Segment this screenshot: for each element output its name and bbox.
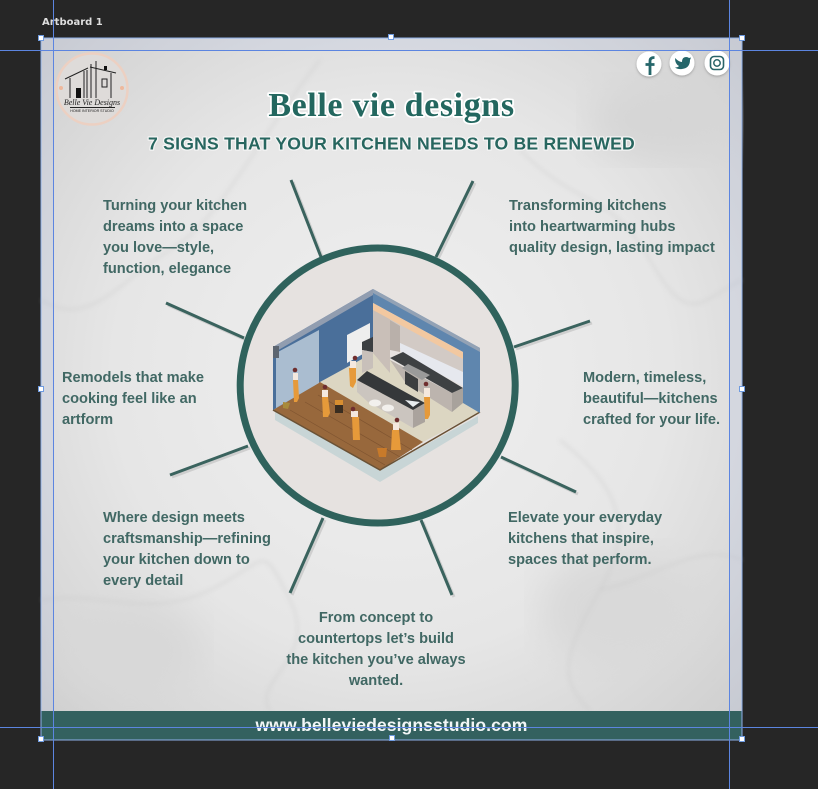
wood floor — [273, 382, 423, 470]
text: top right: into heartwarming hubs — [509, 218, 676, 234]
side counter — [362, 335, 377, 352]
text: top right — [509, 198, 715, 256]
upper cabinets — [390, 314, 463, 373]
text: middle left: Remodels that make — [62, 370, 204, 386]
text: middle left: artform — [62, 412, 113, 428]
text: top left: dreams into a space — [103, 218, 243, 234]
text: bottom left: every detail — [103, 572, 183, 588]
text: middle right: beautiful—kitchens — [583, 390, 718, 406]
text: top right: quality design, lasting impact — [509, 240, 715, 256]
text: bottom right: spaces that perform. — [508, 552, 652, 568]
tall cabinet — [373, 303, 390, 373]
text: middle right: crafted for your life. — [583, 412, 720, 428]
text: bottom center: countertops let’s build — [298, 630, 454, 646]
text: bottom center: wanted. — [349, 672, 403, 688]
left wall — [273, 289, 373, 410]
text: middle right — [583, 370, 720, 428]
text: bottom left: Where design meets — [103, 510, 245, 526]
workers — [293, 368, 430, 450]
text: top left — [103, 198, 247, 276]
text: bottom center: From concept to — [319, 610, 433, 626]
text: top left: you love—style, — [103, 240, 214, 256]
right wall — [373, 289, 480, 413]
icon: instagram — [704, 50, 730, 76]
text: middle left — [62, 370, 204, 428]
lower cabinets — [390, 360, 452, 412]
text: bottom center — [286, 610, 466, 688]
text: middle left: cooking feel like an — [62, 390, 197, 406]
floor shadow — [275, 412, 478, 482]
text: top left: Turning your kitchen — [103, 198, 247, 214]
text: bottom right — [508, 510, 662, 568]
subtitle: 7 SIGNS THAT YOUR KITCHEN NEEDS TO BE RENEWED — [148, 134, 635, 154]
footer bar — [41, 711, 742, 740]
text: top left: function, elegance — [103, 260, 231, 276]
fridge — [347, 323, 370, 363]
text: bottom left: your kitchen down to — [103, 552, 250, 568]
artboard label: Artboard 1 — [42, 17, 103, 28]
text: bottom center: the kitchen you’ve always — [286, 652, 466, 668]
range hood — [390, 320, 400, 352]
icon: twitter — [670, 50, 694, 76]
splashback — [398, 342, 463, 386]
island — [357, 380, 413, 428]
text: bottom right: kitchens that inspire, — [508, 530, 654, 546]
text: bottom left: craftsmanship—refining — [103, 530, 271, 546]
counter top — [390, 352, 463, 393]
logo: Belle Vie Designs — [64, 98, 120, 107]
icon: facebook — [636, 52, 662, 76]
text: bottom right: Elevate your everyday — [508, 510, 662, 526]
logo: HOME INTERIOR STUDIO — [70, 109, 114, 113]
peach band — [373, 303, 463, 359]
text: bottom left — [103, 510, 271, 588]
tile floor — [320, 350, 480, 442]
title: Belle vie designs — [268, 87, 515, 124]
text: top right: Transforming kitchens — [509, 198, 667, 214]
text: middle right: Modern, timeless, — [583, 370, 706, 386]
stools — [369, 400, 381, 406]
website url: www.belleviedesignsstudio.com — [256, 714, 527, 734]
